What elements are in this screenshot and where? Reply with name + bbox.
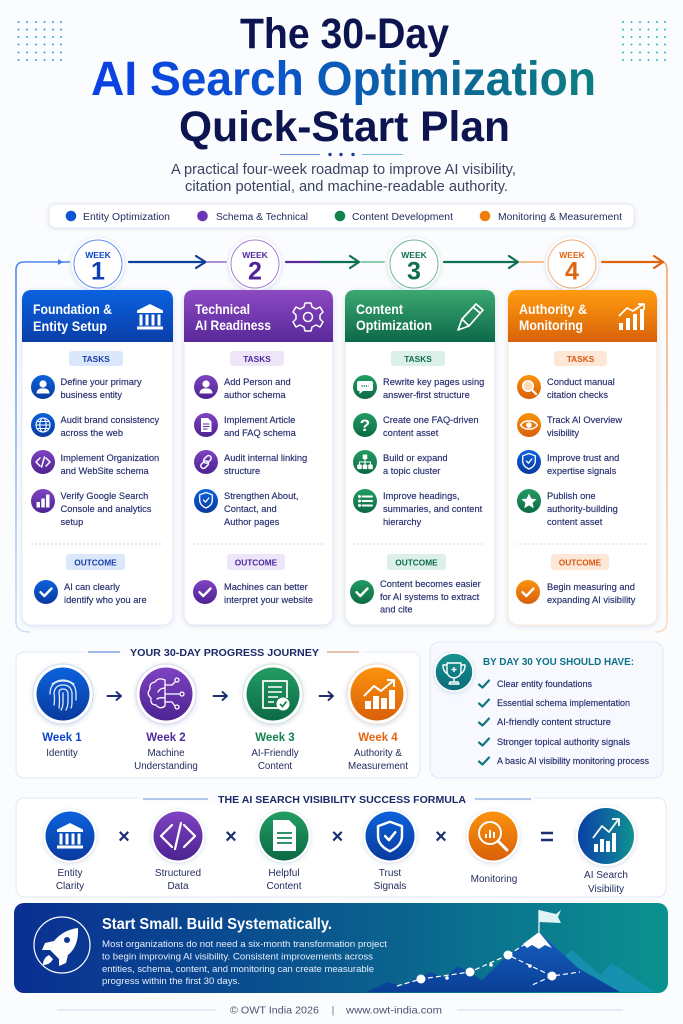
task: AI overview: visibility [547,428,579,438]
icon: helpful content [258,810,310,862]
task: citation checks: citation checks [547,390,608,400]
legend: Schema & Technical [216,212,308,223]
labels: Content [266,881,302,892]
outcome: identify: AI can clearly [64,582,120,592]
operator: multiply: × [435,826,447,848]
labels: Signals [374,881,406,892]
banner heading: Start Small. Build Systematically. [102,916,332,933]
label: week 2 machine understanding: Machine [147,748,185,759]
icon: monitoring [466,810,520,862]
roadmap frame left [16,262,70,632]
label: week 4 authority and measurement: Measurement [348,761,408,772]
task: headings [353,489,483,527]
card header: content optimization: Content [356,301,403,317]
labels: AI Search [584,870,628,881]
task: search console: Console and analytics [60,504,152,514]
outcome: interpret: Machines can better [224,582,308,592]
task: search console: setup [60,517,83,527]
footer [57,1004,623,1016]
icon: fingerprint [33,664,93,724]
label: week 1 identity: Identity [46,748,78,759]
task: audit brand [31,413,160,438]
task: headings: summaries, and content [383,504,483,514]
subtitle: A practical four-week roadmap to improve AI visibility, [171,161,516,178]
operator: equals [541,833,553,840]
formula heading: THE AI SEARCH VISIBILITY SUCCESS FORMULA [218,794,466,806]
outcome pill [551,554,609,570]
operator: multiply: × [118,826,130,848]
icon: entity clarity [44,810,96,862]
task: FAQ asset: Create one FAQ-driven [383,415,479,425]
week 1 badge [72,238,124,290]
task: rewrite pages [353,375,484,400]
outcome: identify: identify who you are [64,595,147,605]
task: article schema [194,413,297,438]
tasks pill: TASKS [404,354,432,364]
card header: authority and monitoring: Authority & [519,301,587,317]
operator: multiply: × [225,826,237,848]
icon: arrow [108,692,121,700]
week 2 badge: WEEK [242,250,269,260]
icon: pencil [458,304,483,330]
labels [56,868,628,895]
card header: technical AI readiness: AI Readiness [195,317,271,333]
outcome: measuring: Begin measuring and [547,582,635,592]
task: define entity: Define your primary [60,377,142,387]
task: article schema: and FAQ schema [224,428,297,438]
icon: trophy [435,653,473,691]
label: week 3 AI-friendly content: Week 3 [255,732,295,744]
formula heading [140,794,534,806]
icon: growth measurement [347,664,407,724]
icon: content document [243,664,303,724]
footer: | [332,1004,334,1016]
decorative dot grid left [18,21,62,61]
mountain illustration [366,910,655,992]
week 3 badge: WEEK [401,250,428,260]
task: publish asset: authority-building [547,504,618,514]
task: organization schema: Implement Organization [60,453,159,463]
title divider [280,153,403,156]
task: internal linking [194,450,307,476]
task: FAQ asset: content asset [383,428,439,438]
task: citation checks: Conduct manual [547,377,615,387]
label: week 2 machine understanding: Week 2 [146,732,186,744]
task: publish asset: Publish one [547,491,596,501]
task: rewrite pages: Rewrite key pages using [383,377,484,387]
title: The 30-Day [240,10,449,58]
labels: Entity [57,868,83,879]
labels: Data [167,881,189,892]
task: AI overview: Track AI Overview [547,415,622,425]
tasks pill [230,351,284,366]
panel: progress journey [16,647,420,778]
week 2 badge: 2 [248,258,262,286]
labels: Trust [379,868,401,879]
labels: Monitoring [471,874,517,885]
banner body: entities, schema, content, and monitoring can create measurable [102,963,374,974]
subtitle: citation potential, and machine-readable authority. [185,178,508,195]
task: FAQ asset: ? [360,416,370,435]
operator: multiply: × [332,826,343,848]
week 1 badge: WEEK [85,250,112,260]
icon: rocket [34,917,90,973]
checklist: Stronger topical authority signals [497,737,630,747]
card header: technical AI readiness [184,290,333,342]
task: headings: Improve headings, [383,491,460,501]
card header: authority and monitoring: Monitoring [519,317,583,333]
label: week 4 authority and measurement [348,732,408,772]
outcome pill: OUTCOME [74,558,117,568]
task: publish asset: content asset [547,517,603,527]
icon: arrow [214,692,227,700]
icon: arrow [320,692,333,700]
checklist: AI-friendly content structure [497,717,611,727]
task: citation checks [517,375,615,400]
task: trust signals [517,450,619,476]
outcome pill: OUTCOME [235,558,278,568]
card header: authority and monitoring [508,290,657,342]
week 2 badge [228,238,282,290]
subtitle [171,161,516,195]
arrow: week 3 to week 4 [444,256,543,268]
card header: content optimization: Optimization [356,317,432,333]
outcome pill: OUTCOME [559,558,602,568]
footer: © OWT India 2026 [230,1004,319,1016]
week 4 badge [546,238,598,290]
task: strengthen pages: Author pages [224,517,280,527]
task: audit brand: Audit brand consistency [60,415,160,425]
banner body: Most organizations do not need a six-month transformation project [102,938,387,949]
task: article schema: Implement Article [224,415,295,425]
task: organization schema: and WebSite schema [60,466,150,476]
task: rewrite pages: answer-first structure [383,390,470,400]
task: internal linking: structure [224,466,260,476]
task: topic cluster: a topic cluster [383,466,440,476]
task: AI overview [517,413,622,438]
icon: growth chart [619,304,644,330]
outcome: extract and cite [350,579,481,614]
roadmap frame right [655,262,667,632]
task: define entity: business entity [60,390,122,400]
arrow: start to week 1 [58,259,63,265]
task: trust signals: expertise signals [547,466,617,476]
panel: week 2 card [184,290,333,625]
task: strengthen pages [194,489,298,527]
card header: foundation and entity setup: Entity Setup [33,318,107,334]
legend: Monitoring & Measurement [498,212,622,223]
week 3 badge: 3 [407,258,421,286]
arrow: week 4 to end [602,256,663,268]
outcome pill [66,554,125,570]
task: search console: Verify Google Search [60,491,148,501]
outcome: extract and cite: Content becomes easier [380,579,481,589]
task: strengthen pages: Contact, and [224,504,277,514]
tasks pill: TASKS [567,354,595,364]
journey heading: YOUR 30-DAY PROGRESS JOURNEY [130,647,319,659]
heading: BY DAY 30 YOU SHOULD HAVE: [483,656,634,668]
icon: AI search visibility [576,806,636,866]
week 1 badge: 1 [91,258,105,286]
card header: foundation and entity setup [22,290,173,342]
task: strengthen pages: Strengthen About, [224,491,298,501]
checklist: Clear entity foundations [497,679,592,689]
label: week 1 identity: Week 1 [42,732,82,744]
panel: by day 30 [430,642,663,778]
card header: content optimization [345,290,495,342]
checklist [479,679,649,766]
label: week 4 authority and measurement: Week 4 [358,732,398,744]
card header: foundation and entity setup: Foundation & [33,301,112,317]
task: trust signals: Improve trust and [547,453,619,463]
panel: success formula [16,794,666,897]
card header: technical AI readiness: Technical [195,301,250,317]
label: week 1 identity [42,732,82,759]
task: define entity [31,375,142,400]
banner body: progress within the first 30 days. [102,975,240,986]
legend: Content Development [352,212,453,223]
title: AI Search Optimization [91,53,596,106]
icon: gear [293,303,323,331]
outcome: extract and cite: for AI systems to extract [380,592,480,602]
week 4 badge: WEEK [559,250,586,260]
label: week 3 AI-friendly content: Content [258,761,292,772]
outcome: identify [34,580,147,605]
tasks pill: TASKS [82,354,110,364]
banner body [102,938,387,986]
outcome: measuring [516,580,636,605]
outcome: measuring: expanding AI visibility [547,595,636,605]
tasks pill: TASKS [243,354,271,364]
legend [49,204,634,228]
label: week 4 authority and measurement: Authority & [354,748,402,759]
task: organization schema [31,450,159,476]
label: week 3 AI-friendly content: AI-Friendly [251,748,299,759]
labels: Clarity [56,881,84,892]
task: person schema [194,375,291,400]
checklist: Essential schema implementation [497,698,630,708]
icon: structured data [152,810,204,862]
outcome: interpret [193,580,313,605]
panel: week 1 card [22,290,173,625]
arrow: week 2 to week 3 [286,256,384,268]
title [91,10,596,151]
task: audit brand: across the web [60,428,123,438]
decorative dot grid right [622,21,666,61]
outcome pill [227,554,285,570]
week 4 badge: 4 [565,258,579,286]
task: person schema: author schema [224,390,286,400]
outcome pill: OUTCOME [395,558,438,568]
task: search console [31,489,152,527]
week 3 badge [388,238,440,290]
task: headings: hierarchy [383,517,422,527]
labels: Helpful [268,868,300,879]
task: topic cluster [353,450,448,476]
icon: AI brain [136,664,196,724]
outcome pill [387,554,446,570]
task: FAQ asset [353,413,479,438]
task: internal linking: Audit internal linking [224,453,307,463]
outcome: extract and cite: and cite [380,604,413,614]
task: publish asset [517,489,618,527]
label: week 3 AI-friendly content [251,732,299,772]
icon: trust signals [364,810,416,862]
footer: www.owt-india.com [345,1004,442,1016]
task: topic cluster: Build or expand [383,453,448,463]
journey heading [84,647,364,659]
tasks pill [554,351,607,366]
title: Quick-Start Plan [179,103,510,151]
panel: week 3 card [345,290,495,625]
panel: closing banner [14,903,668,993]
task: person schema: Add Person and [224,377,291,387]
banner body: to begin improving AI visibility. Consistent improvements across [102,950,373,962]
tasks pill [69,351,123,366]
arrow: week 1 to week 2 [129,256,226,268]
tasks pill [391,351,445,366]
outcome: interpret: interpret your website [224,595,313,605]
panel: week 4 card [508,290,657,625]
labels: Visibility [588,884,624,895]
labels: Structured [155,868,201,879]
label: week 2 machine understanding [134,732,198,772]
checklist: A basic AI visibility monitoring process [497,756,649,766]
label: week 2 machine understanding: Understanding [134,761,198,772]
legend: Entity Optimization [83,212,170,223]
